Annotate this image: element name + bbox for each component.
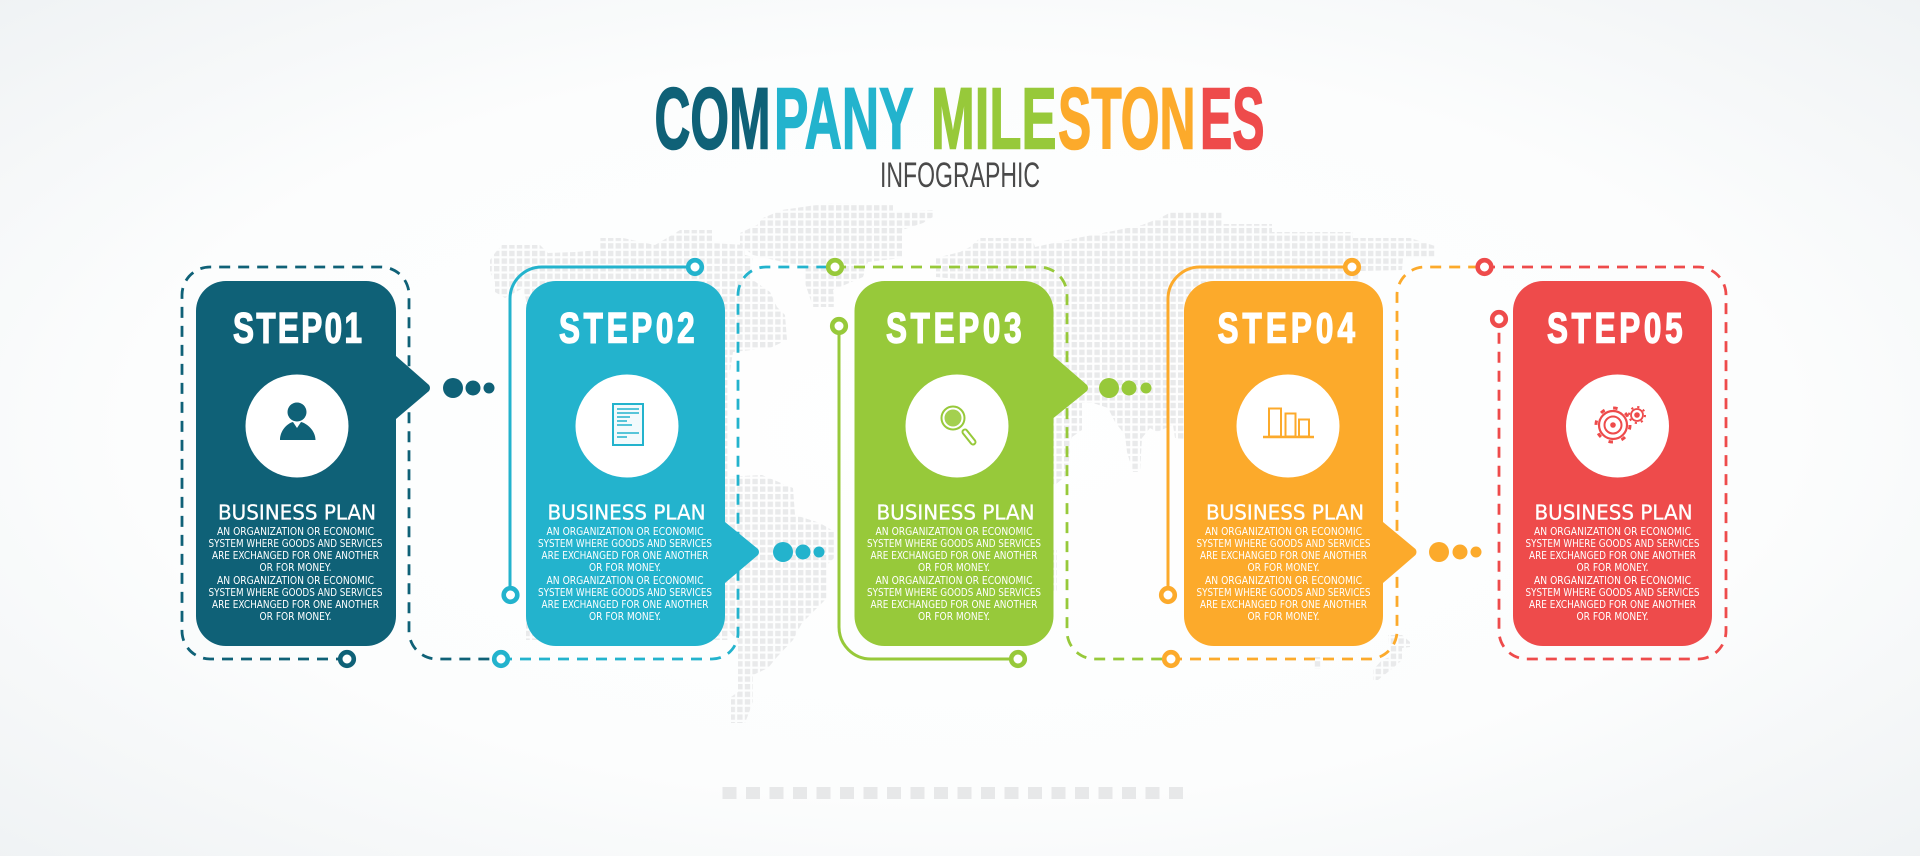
arrow dots: step 1 to 2 bbox=[443, 378, 494, 398]
icon: document bbox=[613, 404, 643, 445]
description: OR FOR MONEY. bbox=[918, 610, 990, 623]
description: SYSTEM WHERE GOODS AND SERVICES bbox=[1526, 586, 1700, 599]
subheading: BUSINESS PLAN bbox=[548, 500, 706, 524]
arrow dots: step 4 to 5 bbox=[1429, 542, 1482, 562]
description: SYSTEM WHERE GOODS AND SERVICES bbox=[1526, 537, 1700, 550]
step heading: STEP02 bbox=[559, 304, 698, 352]
description: OR FOR MONEY. bbox=[1248, 610, 1320, 623]
card shape bbox=[854, 281, 1088, 646]
title: ES bbox=[1200, 70, 1264, 168]
description: AN ORGANIZATION OR ECONOMIC bbox=[1534, 574, 1691, 587]
icon: bar chart bbox=[1263, 408, 1314, 437]
description: ARE EXCHANGED FOR ONE ANOTHER bbox=[1200, 549, 1367, 562]
connector: dashed loop step 5 bbox=[1484, 267, 1726, 659]
description: SYSTEM WHERE GOODS AND SERVICES bbox=[538, 586, 712, 599]
icon circle bbox=[1566, 374, 1669, 478]
panel: step 4 bbox=[1184, 281, 1416, 646]
description: SYSTEM WHERE GOODS AND SERVICES bbox=[867, 537, 1041, 550]
connector end nodes bbox=[340, 260, 1506, 666]
description: OR FOR MONEY. bbox=[260, 561, 332, 574]
description: ARE EXCHANGED FOR ONE ANOTHER bbox=[1200, 598, 1367, 611]
icon circle bbox=[576, 374, 678, 478]
card shape bbox=[526, 281, 759, 646]
title: PANY bbox=[774, 70, 914, 168]
description: SYSTEM WHERE GOODS AND SERVICES bbox=[1196, 586, 1371, 599]
subheading: BUSINESS PLAN bbox=[1534, 500, 1692, 524]
description: ARE EXCHANGED FOR ONE ANOTHER bbox=[212, 549, 379, 562]
panel: step 2 bbox=[526, 281, 759, 646]
step heading: STEP03 bbox=[886, 304, 1025, 352]
panel: step 1 bbox=[196, 281, 430, 646]
icon: magnifying glass bbox=[942, 406, 973, 442]
description: AN ORGANIZATION OR ECONOMIC bbox=[1205, 525, 1362, 538]
description: SYSTEM WHERE GOODS AND SERVICES bbox=[208, 586, 383, 599]
description: AN ORGANIZATION OR ECONOMIC bbox=[546, 525, 704, 538]
description: SYSTEM WHERE GOODS AND SERVICES bbox=[208, 537, 383, 550]
description: ARE EXCHANGED FOR ONE ANOTHER bbox=[870, 598, 1038, 611]
description: ARE EXCHANGED FOR ONE ANOTHER bbox=[1529, 598, 1696, 611]
description: OR FOR MONEY. bbox=[260, 610, 332, 623]
description: ARE EXCHANGED FOR ONE ANOTHER bbox=[542, 549, 709, 562]
description: OR FOR MONEY. bbox=[1576, 610, 1648, 623]
description bbox=[208, 525, 383, 623]
connector: solid line step 3 bbox=[839, 326, 1018, 659]
title: COM bbox=[654, 70, 770, 168]
subtitle: INFOGRAPHIC bbox=[880, 156, 1040, 195]
description: ARE EXCHANGED FOR ONE ANOTHER bbox=[870, 549, 1038, 562]
description: ARE EXCHANGED FOR ONE ANOTHER bbox=[212, 598, 379, 611]
icon: gears bbox=[1596, 407, 1645, 442]
description: OR FOR MONEY. bbox=[1576, 561, 1648, 574]
description: AN ORGANIZATION OR ECONOMIC bbox=[1534, 525, 1691, 538]
description: AN ORGANIZATION OR ECONOMIC bbox=[546, 574, 704, 587]
description: ARE EXCHANGED FOR ONE ANOTHER bbox=[1529, 549, 1696, 562]
step heading: STEP01 bbox=[233, 304, 364, 352]
description bbox=[867, 525, 1041, 623]
description: OR FOR MONEY. bbox=[1248, 561, 1320, 574]
description: OR FOR MONEY. bbox=[589, 610, 661, 623]
description: ARE EXCHANGED FOR ONE ANOTHER bbox=[542, 598, 709, 611]
arrow dots: step 3 to 4 bbox=[1099, 378, 1152, 398]
step heading: STEP05 bbox=[1547, 304, 1686, 352]
subheading: BUSINESS PLAN bbox=[1206, 500, 1364, 524]
connector: solid line step 4 bbox=[1168, 267, 1352, 595]
arrow dots: step 2 to 3 bbox=[773, 542, 824, 562]
connector: dashed line step 4 bbox=[1171, 267, 1484, 659]
connector: dashed line step 3 bbox=[835, 267, 1171, 659]
description bbox=[1526, 525, 1700, 623]
description: SYSTEM WHERE GOODS AND SERVICES bbox=[538, 537, 712, 550]
subheading: BUSINESS PLAN bbox=[876, 500, 1034, 524]
description: OR FOR MONEY. bbox=[918, 561, 990, 574]
connector: dashed loop around step 1 bbox=[182, 267, 501, 659]
description: AN ORGANIZATION OR ECONOMIC bbox=[217, 525, 374, 538]
description: AN ORGANIZATION OR ECONOMIC bbox=[876, 574, 1033, 587]
description: SYSTEM WHERE GOODS AND SERVICES bbox=[1196, 537, 1371, 550]
card shape bbox=[1513, 281, 1712, 646]
panel: step 3 bbox=[854, 281, 1088, 646]
card shape bbox=[1184, 281, 1416, 646]
description: SYSTEM WHERE GOODS AND SERVICES bbox=[867, 586, 1041, 599]
icon: person bbox=[280, 402, 316, 440]
description bbox=[538, 525, 712, 623]
connector: dashed line step 2 bbox=[501, 267, 835, 659]
icon circle bbox=[906, 374, 1008, 478]
description: AN ORGANIZATION OR ECONOMIC bbox=[217, 574, 374, 587]
description bbox=[1196, 525, 1371, 623]
step heading: STEP04 bbox=[1218, 304, 1359, 352]
title: STON bbox=[1058, 70, 1196, 168]
card shape bbox=[196, 281, 430, 646]
description: AN ORGANIZATION OR ECONOMIC bbox=[876, 525, 1033, 538]
title: MILE bbox=[931, 70, 1056, 168]
dotted world map bbox=[490, 203, 1435, 723]
subheading: BUSINESS PLAN bbox=[218, 500, 376, 524]
bottom square strip bbox=[722, 787, 1183, 799]
title bbox=[654, 70, 1264, 168]
icon circle bbox=[246, 374, 348, 478]
connector: solid line step 2 bbox=[510, 267, 695, 595]
panel: step 5 bbox=[1513, 281, 1712, 646]
icon circle bbox=[1236, 374, 1340, 478]
description: OR FOR MONEY. bbox=[589, 561, 661, 574]
description: AN ORGANIZATION OR ECONOMIC bbox=[1205, 574, 1362, 587]
